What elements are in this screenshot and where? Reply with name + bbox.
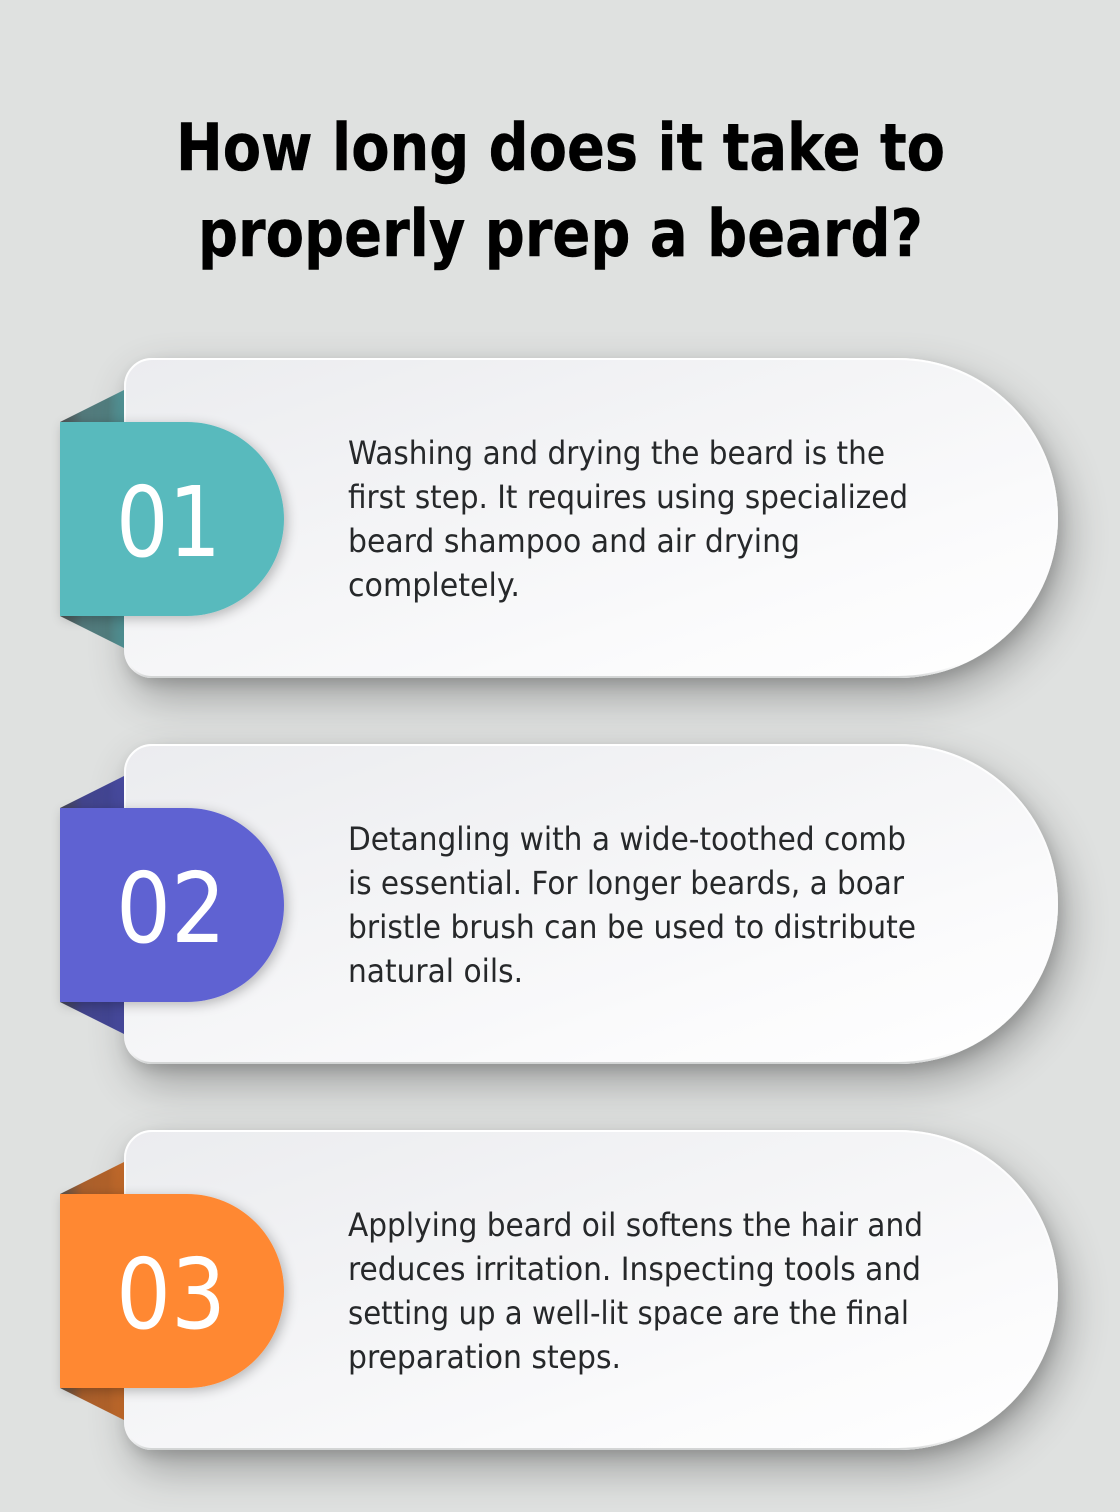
step 01 card [124, 358, 1058, 678]
step 03 description: Applying beard oil softens the hair and [348, 1206, 923, 1244]
step 02 description: Detangling with a wide-toothed comb [348, 820, 906, 858]
step 03 card [124, 1130, 1058, 1450]
step 01 fold tabs [60, 390, 124, 648]
step 01 number badge: 01 [116, 466, 221, 579]
step 01 number badge [60, 422, 284, 616]
title: How long does it take to [176, 111, 945, 186]
step 03 description [348, 1206, 923, 1376]
title [176, 111, 945, 272]
step 02 description: natural oils. [348, 952, 523, 990]
step 03 description: reduces irritation. Inspecting tools and [348, 1250, 921, 1288]
step 01 description [348, 434, 908, 604]
step 03 number badge [60, 1194, 284, 1388]
step 02 description: bristle brush can be used to distribute [348, 908, 916, 946]
step 03 description: setting up a well-lit space are the final [348, 1294, 909, 1332]
step 02 number badge: 02 [116, 852, 226, 965]
step 01 description: completely. [348, 566, 520, 604]
panel: step 01 [60, 358, 1058, 678]
step 02 description: is essential. For longer beards, a boar [348, 864, 905, 902]
step 02 fold tabs [60, 776, 124, 1034]
step 03 fold tabs [60, 1162, 124, 1420]
step 01 description: first step. It requires using specialized [348, 478, 908, 516]
panel: step 02 [60, 744, 1058, 1064]
step 02 description [348, 820, 916, 990]
step 02 card [124, 744, 1058, 1064]
step 01 description: Washing and drying the beard is the [348, 434, 885, 472]
title: properly prep a beard? [198, 197, 923, 272]
step 01 description: beard shampoo and air drying [348, 522, 800, 560]
step 02 number badge [60, 808, 284, 1002]
step 03 number badge: 03 [116, 1238, 226, 1351]
panel: step 03 [60, 1130, 1058, 1450]
step 03 description: preparation steps. [348, 1338, 621, 1376]
